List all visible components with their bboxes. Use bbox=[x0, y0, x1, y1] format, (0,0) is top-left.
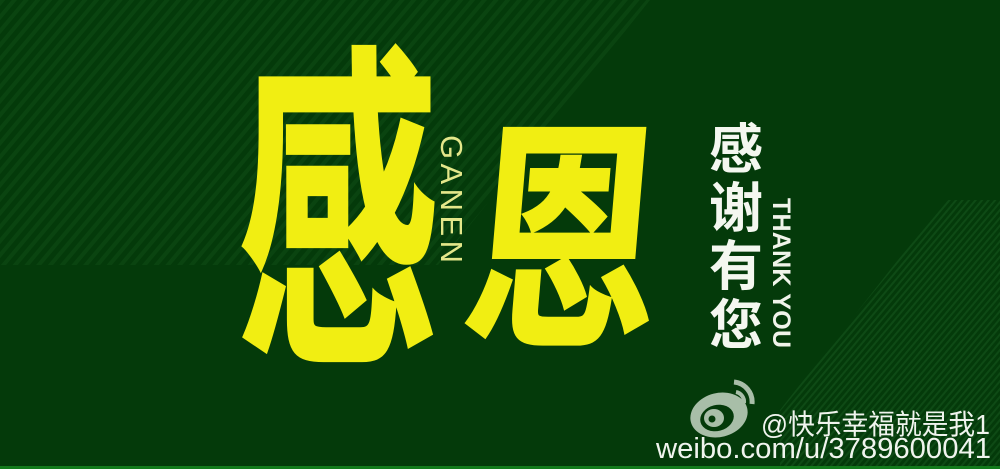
icon: weibo logo bbox=[686, 382, 752, 443]
THANK YOU vertical label: THANK YOU bbox=[767, 198, 795, 348]
GANEN vertical label: GANEN bbox=[434, 135, 469, 263]
heading: 感谢有您: 感 bbox=[709, 120, 763, 180]
heading: 感谢有您: 您 bbox=[709, 296, 763, 356]
heading: 感谢有您: 谢 bbox=[709, 179, 763, 239]
watermark: account name: @快乐幸福就是我1 bbox=[761, 409, 990, 440]
watermark: url: weibo.com/u/3789600041 bbox=[655, 433, 991, 465]
heading: 感谢有您 bbox=[709, 120, 763, 356]
heading: 感谢有您: 有 bbox=[709, 237, 763, 297]
calligraphy title: 恩: 恩 bbox=[454, 47, 678, 397]
